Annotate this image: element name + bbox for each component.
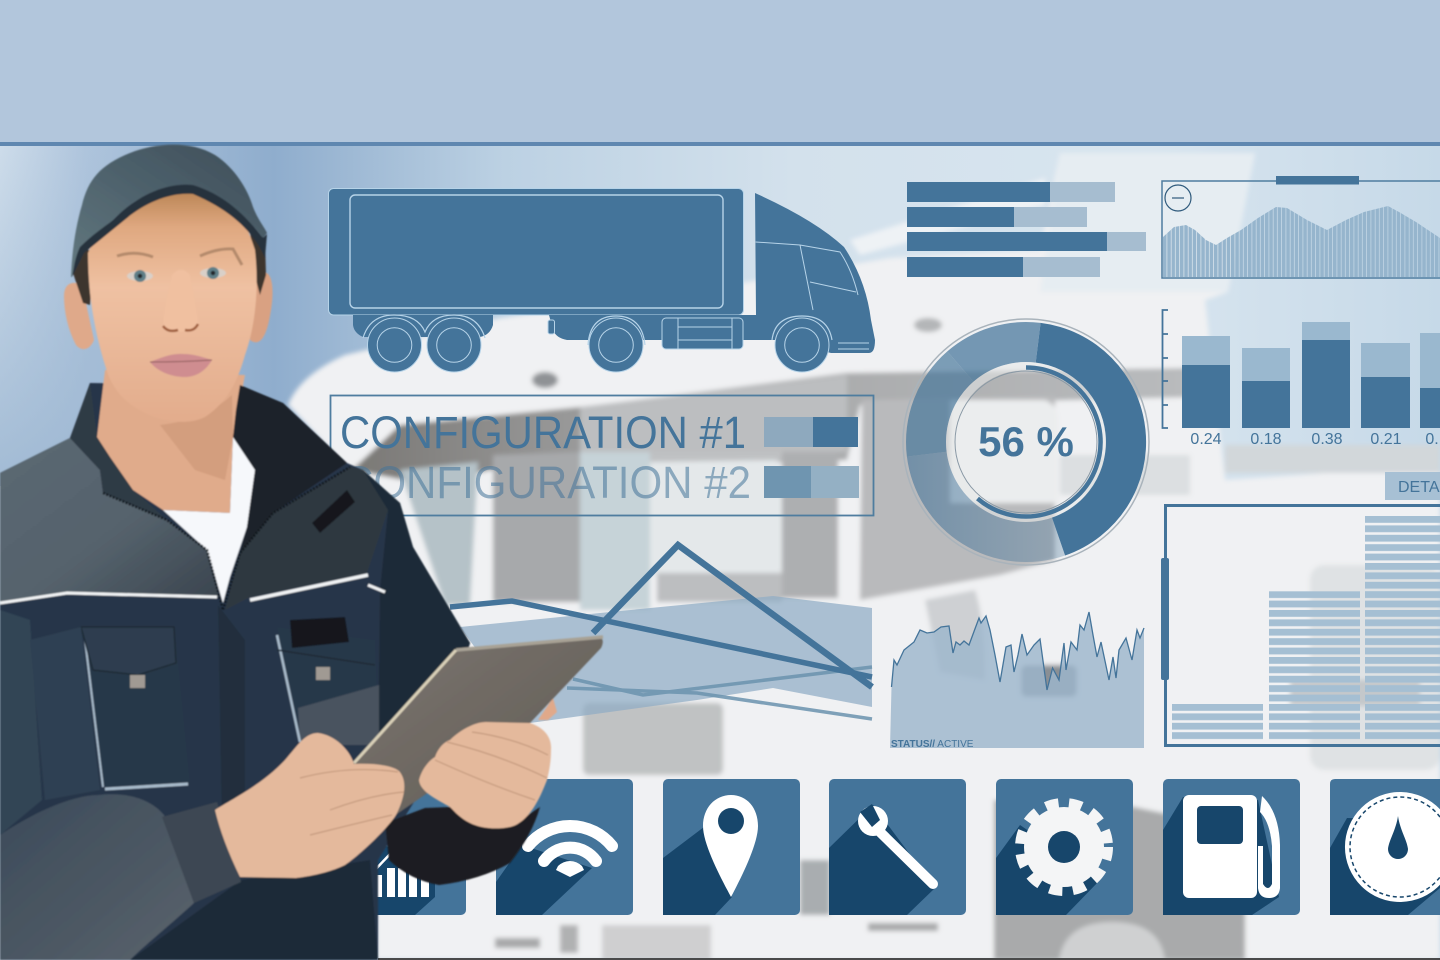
histogram panel xyxy=(1162,176,1440,278)
bar values: 0.18 xyxy=(1250,431,1282,448)
percent value: 56 % xyxy=(978,418,1074,465)
right yoke xyxy=(225,467,388,610)
tablet xyxy=(354,637,603,822)
wheel xyxy=(775,318,829,372)
bar values: 0.24 xyxy=(1190,431,1222,448)
icon: wifi tile xyxy=(496,779,633,915)
banner rule xyxy=(0,142,1440,146)
icon: location pin tile xyxy=(663,779,800,915)
icon: bar chart tile xyxy=(329,779,466,915)
chest velcro xyxy=(312,490,355,533)
bumper detail xyxy=(838,343,869,349)
column 1 xyxy=(1172,704,1263,741)
bar 0.21 xyxy=(1361,343,1410,428)
nostrils xyxy=(163,324,198,331)
light segment xyxy=(947,322,1041,382)
top banner band xyxy=(0,0,1440,146)
donut gauge xyxy=(903,319,1149,565)
undershirt xyxy=(163,437,255,603)
icon: fuel pump tile xyxy=(1163,779,1300,915)
details tab: DETA xyxy=(1398,479,1440,496)
shoulder yoke left xyxy=(0,438,219,603)
details stacked panel xyxy=(1161,506,1440,746)
neck xyxy=(97,370,245,513)
configuration 1 gauge xyxy=(764,417,858,447)
horizontal progress bars xyxy=(907,182,1146,277)
cab outline xyxy=(756,242,858,310)
status area xyxy=(890,612,1144,748)
right collar xyxy=(233,385,347,553)
zoom-out button xyxy=(1165,185,1191,211)
bar values: 0.21 xyxy=(1370,431,1402,448)
right pocket xyxy=(277,617,379,745)
left pocket xyxy=(81,627,190,789)
torso jacket xyxy=(0,383,470,960)
panel tab xyxy=(1276,176,1359,184)
icon: wrench tile xyxy=(829,779,966,915)
trailer axle housing xyxy=(353,315,493,337)
wheel xyxy=(427,318,481,372)
trailer body xyxy=(328,188,744,315)
histogram bars xyxy=(1163,200,1440,277)
eyes xyxy=(127,267,226,282)
person: driver with tablet xyxy=(0,145,603,960)
partial bar xyxy=(1420,333,1440,428)
reflective stripe xyxy=(368,585,385,592)
wheel xyxy=(589,318,643,372)
right arm xyxy=(363,470,470,760)
black right cuff xyxy=(385,807,540,885)
lamp xyxy=(548,320,554,334)
lower body shadow xyxy=(130,860,378,960)
windscreen band xyxy=(352,368,1195,485)
secondary lines xyxy=(567,667,872,719)
bar 0.24 xyxy=(1182,336,1230,428)
peak line xyxy=(593,545,872,687)
chart area xyxy=(460,596,872,723)
nose shading xyxy=(164,270,198,332)
column 2 xyxy=(1269,591,1360,741)
status line xyxy=(892,612,1144,690)
forearm sleeve xyxy=(0,794,194,960)
lips xyxy=(150,354,212,377)
icon: gear tile xyxy=(996,779,1133,915)
side seam panel xyxy=(30,627,100,800)
fuel tank xyxy=(662,318,743,349)
fingertip behind tablet xyxy=(538,698,557,720)
bar values: 0. xyxy=(1425,431,1439,448)
truck silhouette xyxy=(328,188,875,372)
faded segment xyxy=(907,452,1065,562)
hair xyxy=(73,232,266,305)
brows xyxy=(117,249,242,265)
configuration 1 label: CONFIGURATION #1 xyxy=(340,407,746,458)
second cab xyxy=(860,396,1055,600)
bar values: 0.38 xyxy=(1311,431,1343,448)
bar values xyxy=(1190,431,1439,448)
left arm seam panel xyxy=(0,610,42,835)
icon: speedometer tile xyxy=(1330,779,1440,915)
line chart xyxy=(450,545,872,723)
inner ring xyxy=(950,366,1102,518)
left hand xyxy=(215,733,404,878)
stacked bar chart xyxy=(1162,310,1440,448)
sleeve cuff xyxy=(162,802,241,903)
primary line xyxy=(450,601,872,677)
right ear xyxy=(250,272,272,342)
front wheel arch xyxy=(994,800,1245,960)
dark segment xyxy=(1036,323,1146,556)
wheel xyxy=(368,318,422,372)
thin ring xyxy=(955,371,1097,513)
axis xyxy=(1162,310,1168,428)
neck shadow xyxy=(160,395,233,480)
trailer cargo outline xyxy=(350,195,723,308)
panel handle xyxy=(1161,558,1169,680)
status area chart xyxy=(890,612,1144,750)
details tab xyxy=(1385,472,1440,500)
column 3 xyxy=(1365,516,1440,741)
bar 0.18 xyxy=(1242,348,1290,428)
bar 0.38 xyxy=(1302,322,1350,428)
configuration 2 label: CONFIGURATION #2 xyxy=(343,457,751,508)
reflective stripe xyxy=(250,575,368,600)
wheel arches xyxy=(363,315,832,345)
left collar xyxy=(70,383,167,520)
zipper xyxy=(103,467,350,610)
configuration panel xyxy=(330,396,874,516)
cap xyxy=(71,145,267,277)
placket xyxy=(218,605,245,880)
configuration 2 gauge xyxy=(764,466,859,498)
light segment xyxy=(906,351,974,457)
right hand xyxy=(419,722,551,828)
chassis and cab xyxy=(549,193,875,353)
lip line xyxy=(150,360,212,362)
face xyxy=(88,190,257,422)
left ear xyxy=(64,283,94,349)
reflective stripe xyxy=(0,593,217,603)
status caption: STATUS// ACTIVE xyxy=(891,739,974,750)
progress arc xyxy=(978,368,1101,516)
